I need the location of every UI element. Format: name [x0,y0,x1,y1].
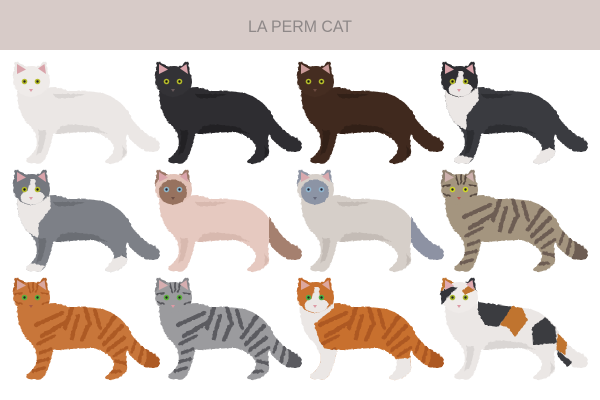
cat: brown tabby [441,169,588,272]
cat: blue point [297,169,444,272]
cat: white [13,61,160,164]
cat: calico [440,277,588,380]
cat: chocolate brown [297,61,444,164]
cat: blue and white [13,169,160,272]
title band [0,0,600,50]
cat: black [155,61,302,164]
cat: red tabby and white [297,277,444,380]
title: LA PERM CAT [248,17,352,36]
cat: red tabby [13,277,160,380]
cat: black and white [441,61,588,164]
cat: silver tabby [155,277,302,380]
cat: lilac point (pink body) [155,169,302,272]
